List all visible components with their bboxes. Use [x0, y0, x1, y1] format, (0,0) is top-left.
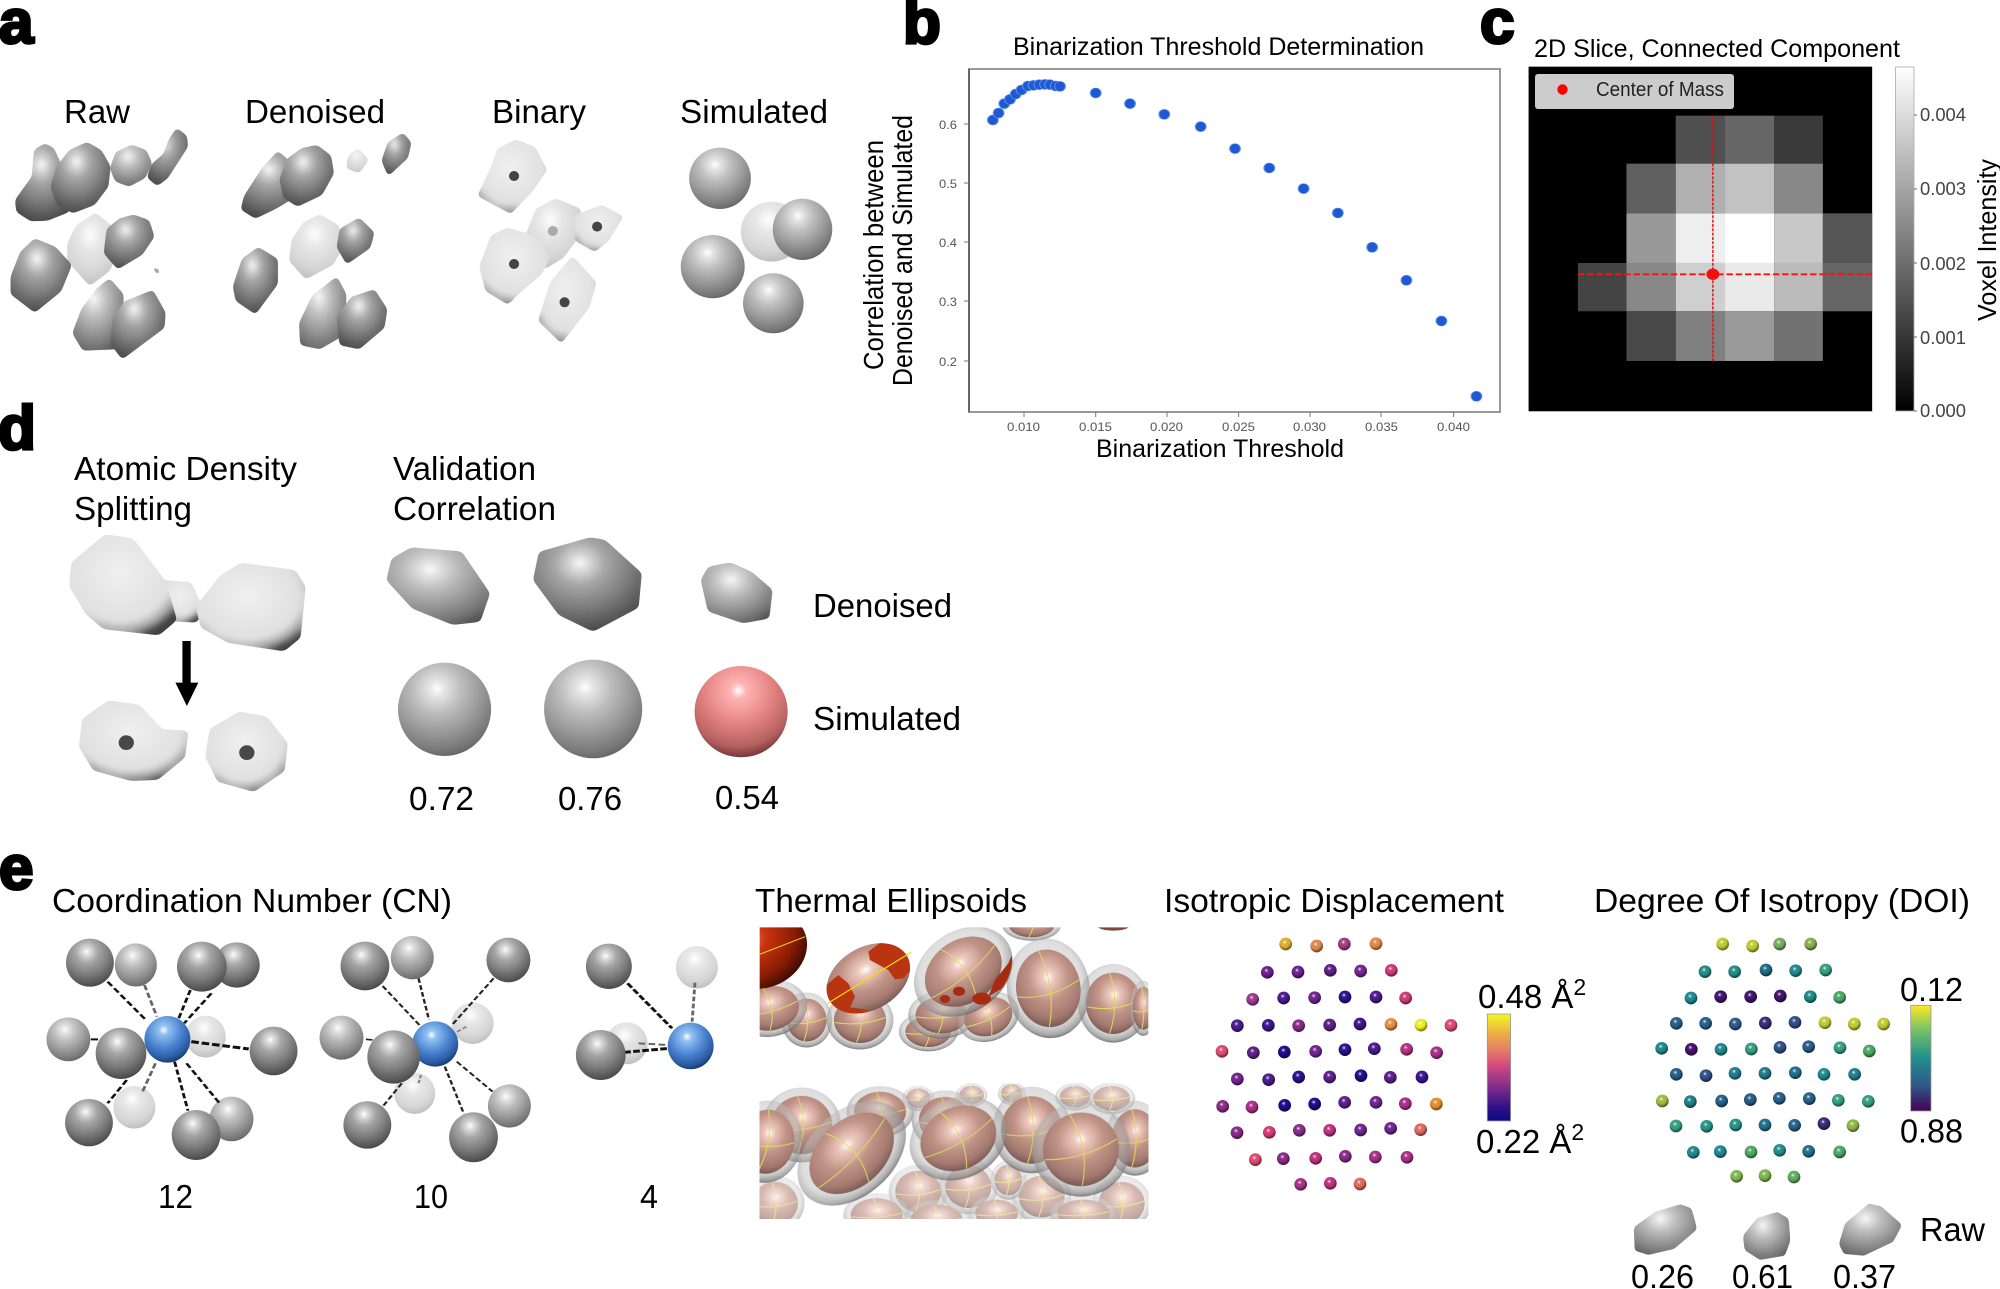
correlation values: 0.72 [409, 780, 474, 817]
colorbar: 0.001 [1920, 327, 1966, 348]
heading: atomic density splitting: Atomic Density [74, 450, 298, 487]
x tick labels: 0.040 [1437, 420, 1470, 434]
heading: atomic density splitting: Splitting [74, 490, 192, 527]
simulated spheres [398, 660, 788, 758]
heatmap [1529, 67, 1872, 411]
y tick labels: 0.4 [939, 236, 957, 250]
y tick labels: 0.6 [939, 118, 957, 132]
correlation values: 0.54 [715, 779, 779, 816]
colorbar: 0.002 [1920, 253, 1966, 274]
heading: thermal ellipsoids: Thermal Ellipsoids [755, 882, 1027, 919]
chart title: Binarization Threshold Determination [1013, 33, 1424, 61]
panel d: splitting and validation [0, 394, 961, 817]
correlation values [409, 779, 779, 817]
colorbar max label: 0.48 Å [1478, 978, 1573, 1015]
atom lattice coloured by DOI [1655, 938, 1890, 1183]
CN value labels [158, 1178, 658, 1215]
heading: Denoised: Denoised [245, 93, 385, 130]
y tick labels [939, 118, 957, 369]
row label: Simulated: Simulated [813, 700, 961, 737]
heading: atomic density splitting [74, 450, 298, 527]
row label: Denoised: Denoised [813, 587, 952, 624]
colorbar: 0.003 [1920, 178, 1966, 199]
plot frame [964, 69, 1500, 417]
colorbar top label: 0.12 [1900, 971, 1963, 1008]
heading: 2D Slice, Connected Component [1534, 35, 1900, 63]
y tick labels: 0.2 [939, 355, 957, 369]
panel a: density maps [0, 0, 832, 359]
x axis label: Binarization Threshold [1096, 435, 1344, 463]
heading: Binary: Binary [492, 93, 586, 130]
heading: validation correlation [393, 450, 556, 527]
x tick labels: 0.035 [1365, 420, 1398, 434]
raw density blobs [11, 129, 187, 359]
colorbar min label: 2 [1571, 1119, 1584, 1145]
colorbar: DOI [1911, 1005, 1931, 1111]
denoised density blobs [233, 133, 411, 349]
heading: isotropic displacement: Isotropic Displacement [1164, 882, 1504, 919]
heading: Raw: Raw [64, 93, 130, 130]
heading: coordination number: Coordination Number (CN) [52, 882, 452, 919]
y tick labels: 0.3 [939, 295, 957, 309]
colorbar [1896, 67, 1966, 421]
denoised blobs [387, 538, 772, 631]
arrow: split [175, 641, 198, 706]
panel e: degree of isotropy [1594, 882, 1985, 1289]
CN 4 cluster [576, 944, 718, 1080]
y tick labels: 0.5 [939, 177, 957, 191]
panel e: thermal ellipsoids [756, 888, 1148, 1219]
colorbar bottom label: 0.88 [1900, 1112, 1963, 1150]
heading: Simulated: Simulated [680, 93, 828, 130]
CN value labels: 10 [414, 1178, 448, 1215]
simulated density spheres [681, 148, 832, 333]
CN value labels: 4 [640, 1178, 658, 1215]
raw label: Raw [1920, 1211, 1985, 1248]
raw DOI values [1631, 1258, 1896, 1289]
correlation values: 0.76 [558, 780, 622, 817]
panel c: connected component slice [1480, 0, 2000, 421]
merged density [70, 535, 305, 651]
x tick labels: 0.010 [1007, 420, 1040, 434]
panel b: threshold chart [858, 0, 1500, 463]
x tick labels: 0.030 [1293, 420, 1326, 434]
colorbar: 0.000 [1920, 400, 1966, 421]
CN 10 cluster [320, 936, 531, 1162]
y axis label [858, 115, 918, 386]
heading: validation correlation: Correlation [393, 490, 556, 527]
legend: Center of Mass [1596, 79, 1724, 101]
CN value labels: 12 [158, 1178, 193, 1215]
panel label e: e [0, 834, 33, 903]
x tick labels: 0.020 [1150, 420, 1183, 434]
x tick labels: 0.025 [1222, 420, 1255, 434]
colorbar: displacement [1487, 1014, 1511, 1121]
heading: validation correlation: Validation [393, 450, 536, 487]
split densities with centroids [80, 701, 287, 791]
legend [1535, 74, 1734, 109]
scatter points [988, 79, 1482, 401]
colorbar max label: 2 [1573, 974, 1586, 1000]
panel e: isotropic displacement [1164, 882, 1586, 1191]
y axis label: Denoised and Simulated [887, 115, 918, 386]
x tick labels: 0.015 [1079, 420, 1112, 434]
CN 12 cluster [46, 939, 298, 1160]
binary density blobs with centroids [478, 140, 623, 343]
ellipsoid render [760, 927, 1148, 1219]
y axis label: Correlation between [858, 140, 889, 370]
atom lattice coloured by displacement [1216, 937, 1457, 1191]
colorbar min label: 0.22 Å [1476, 1123, 1571, 1160]
x tick labels [1007, 420, 1470, 434]
raw density examples [1634, 1204, 1902, 1259]
heading: degree of isotropy: Degree Of Isotropy (DOI) [1594, 882, 1970, 919]
panel e: label and coordination number [0, 834, 718, 1215]
colorbar: 0.004 [1920, 104, 1966, 125]
